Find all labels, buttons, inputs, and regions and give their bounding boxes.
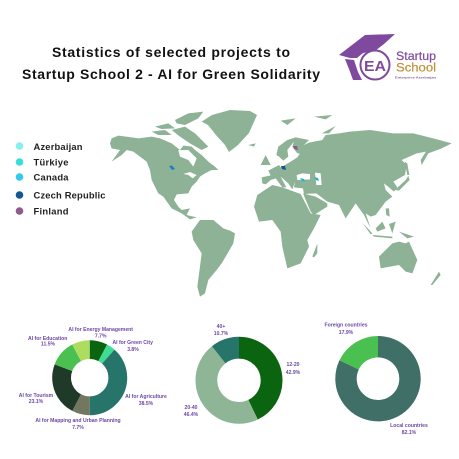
labels: AI topics: 3.8%	[127, 347, 139, 353]
labels: countries: 17.9%	[339, 330, 354, 336]
labels: AI topics: AI for Energy Management	[68, 327, 133, 333]
marker: Azerbaijan	[314, 177, 319, 181]
labels: AI topics	[19, 327, 167, 431]
world map	[110, 110, 452, 297]
labels: AI topics: 11.5%	[41, 342, 56, 348]
labels: AI topics: AI for Green City	[112, 340, 153, 346]
labels: age groups: 20-40	[184, 405, 198, 411]
labels: AI topics: 23.1%	[29, 399, 44, 405]
labels: countries: 82.1%	[402, 430, 417, 436]
legend: Türkiye	[34, 156, 68, 168]
labels: AI topics: AI for Tourism	[19, 393, 54, 399]
donut chart: AI topics	[62, 350, 118, 406]
logo: Startup School: Startup	[396, 49, 436, 63]
labels: age groups	[184, 324, 301, 418]
title: Statistics of selected projects to	[52, 44, 290, 60]
labels: AI topics: 7.7%	[72, 425, 84, 431]
Eurasia, Africa and Oceania	[248, 115, 452, 285]
marker: Türkiye	[300, 178, 305, 182]
legend	[16, 141, 106, 216]
donut chart: age groups	[206, 348, 272, 413]
marker: Czech Republic	[281, 166, 286, 170]
labels: age groups: 46.4%	[184, 412, 199, 418]
logo: Startup School	[339, 34, 436, 80]
Americas and Greenland	[110, 110, 257, 297]
legend: Canada	[34, 172, 69, 182]
labels: AI topics: 38.5%	[139, 401, 154, 407]
labels: AI topics: AI for Education	[28, 336, 67, 342]
marker: Finland	[293, 146, 298, 150]
labels: countries	[324, 322, 428, 436]
labels: AI topics: AI for Agriculture	[125, 394, 167, 400]
labels: age groups: 12-20	[286, 362, 300, 368]
labels: countries: Foreign countries	[324, 322, 368, 328]
title	[22, 44, 320, 82]
labels: age groups: 10.7%	[214, 331, 229, 337]
map markers	[169, 146, 319, 182]
logo: Startup School: EA	[364, 58, 386, 75]
labels: countries: Local countries	[390, 423, 428, 429]
legend: Finland	[34, 206, 69, 216]
marker: Canada	[169, 166, 175, 170]
labels: age groups: 42.9%	[286, 370, 301, 376]
title: Startup School 2 - AI for Green Solidarity	[22, 66, 320, 82]
logo: Startup School: Enterprise Azerbaijan	[395, 76, 436, 80]
legend: Czech Republic	[34, 190, 106, 200]
donut chart: countries	[346, 347, 410, 411]
legend: Azerbaijan	[34, 141, 83, 152]
labels: AI topics: 7.7%	[95, 334, 107, 340]
labels: age groups: 40+	[217, 324, 225, 330]
logo: Startup School: School	[396, 61, 436, 75]
labels: AI topics: AI for Mapping and Urban Planning	[35, 418, 121, 424]
